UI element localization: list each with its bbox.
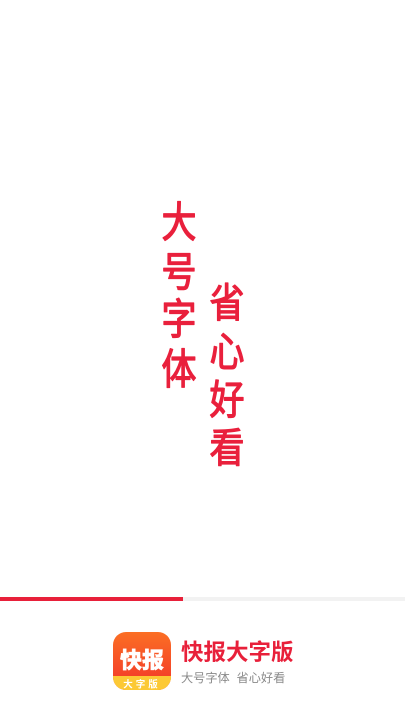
slogan column: easy on the eyes: 心	[210, 330, 244, 375]
slogan column: large font: 字	[162, 297, 196, 344]
slogan column: large font: 号	[162, 250, 196, 295]
slogan column: large font: 体	[162, 347, 196, 394]
icon: app logo: 大字版	[123, 678, 161, 690]
progress bar	[0, 597, 405, 601]
icon: app logo	[113, 632, 171, 690]
icon: app logo: 快报	[120, 648, 164, 673]
slogan column: large font	[162, 200, 196, 394]
slogan column: easy on the eyes: 好	[210, 378, 244, 423]
slogan column: easy on the eyes	[210, 281, 244, 471]
app name: 快报大字版	[181, 640, 294, 665]
slogan column: large font: 大	[162, 200, 196, 247]
tagline: 大号字体 省心好看	[181, 670, 285, 685]
slogan column: easy on the eyes: 省	[210, 281, 244, 326]
slogan column: easy on the eyes: 看	[210, 426, 244, 471]
